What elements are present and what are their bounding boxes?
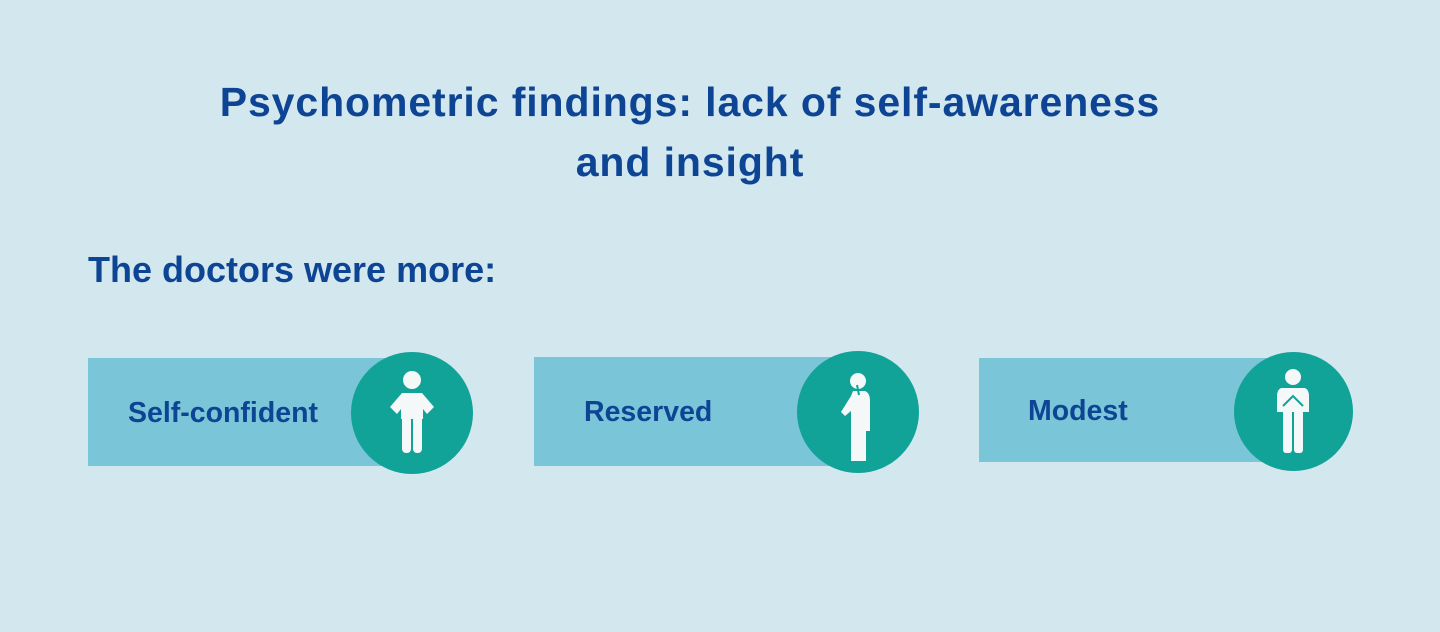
title: and insight <box>576 139 804 185</box>
panel: modest <box>979 352 1353 471</box>
icon: confident person <box>351 352 473 474</box>
title <box>220 79 1160 185</box>
icon: modest person <box>1234 352 1353 471</box>
panel: self-confident <box>88 352 473 474</box>
label: reserved: Reserved <box>584 396 712 428</box>
icon: reserved person <box>797 351 919 473</box>
panel: reserved <box>534 351 919 473</box>
label: self-confident: Self-confident <box>128 397 318 429</box>
title: Psychometric findings: lack of self-awareness <box>220 79 1160 125</box>
label: modest: Modest <box>1028 395 1128 427</box>
subtitle: The doctors were more: <box>88 249 496 290</box>
